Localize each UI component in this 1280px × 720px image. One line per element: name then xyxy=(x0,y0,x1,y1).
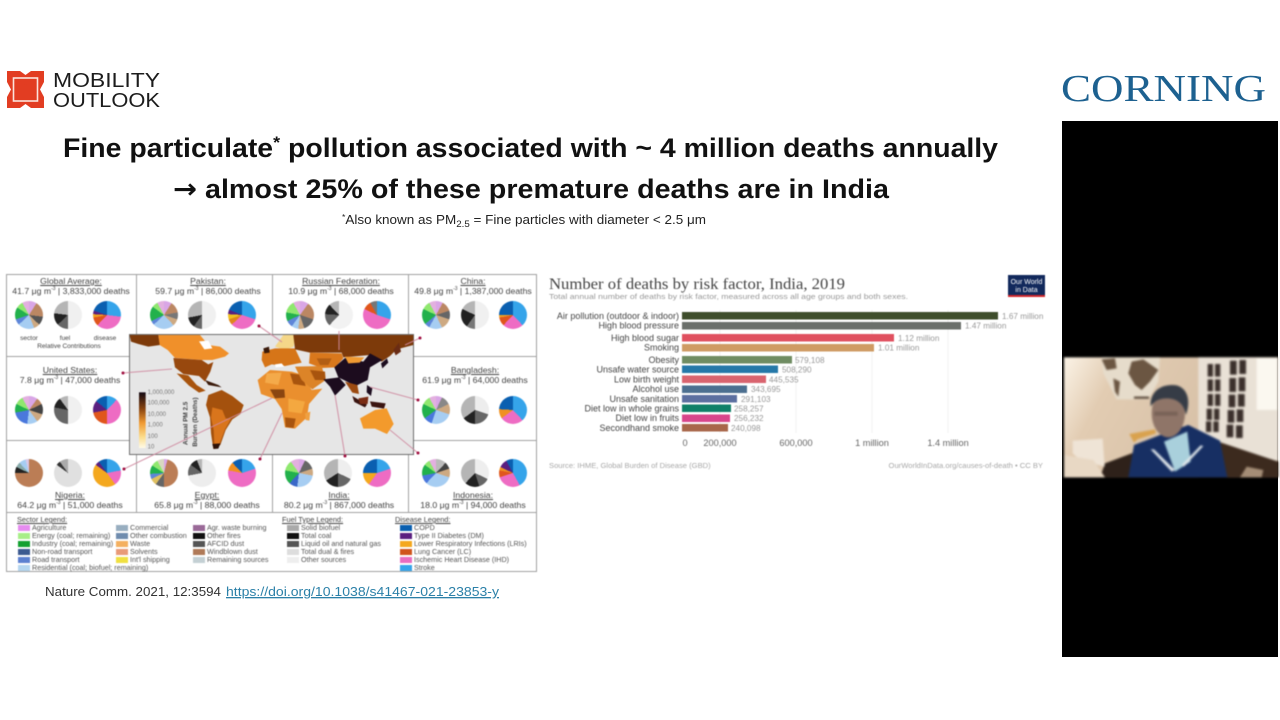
panel: India: India: xyxy=(328,490,350,500)
Russia and Asia xyxy=(293,335,413,409)
panel: Nigeria xyxy=(6,440,137,513)
chart: number of deaths by risk factor, India 2019 xyxy=(548,274,1046,470)
row labels: Unsafe water source xyxy=(596,364,679,374)
panel: Bangladesh: Bangladesh: xyxy=(451,365,499,375)
title: Fine particulate xyxy=(63,133,263,163)
panel: Egypt: 65.8 μg m-3 | 88,000 deaths xyxy=(154,500,260,510)
sector legend: Energy (coal; remaining) xyxy=(32,531,110,540)
logo: Our World in Data: Our World xyxy=(1011,279,1042,286)
panel: Global Average: 41.7 μg m-3 | 3,833,000 deaths xyxy=(12,286,130,296)
panel: Pakistan: 59.7 μg m-3 | 86,000 deaths xyxy=(155,286,261,296)
colour bar legend: 10 xyxy=(148,444,155,450)
panel: Pakistan: Pakistan: xyxy=(190,276,226,286)
value labels xyxy=(731,312,1044,433)
value labels: 445,535 xyxy=(769,376,799,384)
title: * xyxy=(273,133,280,152)
panel: Nigeria: Nigeria: xyxy=(55,490,85,500)
fuel type legend: Liquid oil and natural gas xyxy=(301,539,381,548)
panel: China: 49.8 μg m-3 | 1,387,000 deaths xyxy=(414,286,532,296)
logo: Mobility Outlook xyxy=(7,69,160,112)
sector legend: Int'l shipping xyxy=(130,555,170,564)
wall map art xyxy=(1102,357,1160,399)
sector legend: Sector Legend: xyxy=(17,515,67,524)
colour bar legend: 100 xyxy=(148,434,158,440)
Africa xyxy=(258,370,322,429)
logo wordmark xyxy=(53,69,160,112)
disease legend: Disease Legend: xyxy=(395,515,450,524)
panel: China xyxy=(408,274,537,357)
panel: legends xyxy=(6,512,537,572)
sector legend: Agr. waste burning xyxy=(207,523,267,532)
sector legend: Commercial xyxy=(130,523,168,532)
footnote: Also known as PM xyxy=(345,213,456,227)
citation: Nature Comm. 2021, 12:3594 xyxy=(45,584,221,599)
x axis: 200,000 xyxy=(703,438,737,448)
panel: Russian Federation xyxy=(272,274,409,357)
colour bar legend xyxy=(139,390,199,450)
sector legend: Other combustion xyxy=(130,531,187,540)
disease legend xyxy=(394,515,527,572)
fuel type legend xyxy=(281,515,382,564)
connector lines from map to panels xyxy=(120,324,422,472)
sector legend: Solvents xyxy=(130,547,158,556)
french doors xyxy=(1198,357,1278,477)
colour bar legend: 10,000 xyxy=(148,412,167,418)
panel: Global Average: sector xyxy=(20,335,38,342)
panel: Global Average: disease xyxy=(94,335,116,342)
Australia xyxy=(360,408,394,434)
panel: Global Average: fuel xyxy=(60,335,70,342)
sector legend: Agriculture xyxy=(32,523,66,532)
panel: Nigeria: 64.2 μg m-3 | 51,000 deaths xyxy=(17,500,123,510)
x axis: 600,000 xyxy=(779,438,813,448)
sector legend: Windblown dust xyxy=(207,547,258,556)
panel: Indonesia: 18.0 μg m-3 | 94,000 deaths xyxy=(420,500,526,510)
row labels: High blood pressure xyxy=(598,320,679,330)
disease legend: Lower Respiratory Infections (LRIs) xyxy=(414,539,527,548)
value labels: 240,098 xyxy=(731,424,761,433)
panel: Pakistan xyxy=(136,274,273,357)
webcam: presenter video xyxy=(1062,356,1280,480)
panel: United States: United States: xyxy=(43,365,97,375)
value labels: 1.47 million xyxy=(965,322,1007,330)
logo: Our World in Data: in Data xyxy=(1015,287,1038,294)
sector legend: Waste xyxy=(130,539,150,548)
value labels: 256,232 xyxy=(734,414,764,423)
x axis xyxy=(682,438,969,448)
source line: OurWorldInData.org/causes-of-death • CC BY xyxy=(889,461,1043,470)
fuel type legend: Solid biofuel xyxy=(301,523,340,532)
colour bar legend: 100,000 xyxy=(148,401,170,407)
x axis: 0 xyxy=(682,438,688,448)
panel: Egypt: Egypt: xyxy=(195,490,219,500)
panel: United States: 7.8 μg m-3 | 47,000 deaths xyxy=(20,375,120,385)
title: pollution associated with ~ 4 million deaths annually xyxy=(280,133,998,163)
row labels: Obesity xyxy=(648,355,679,365)
panel: Bangladesh: 61.9 μg m-3 | 64,000 deaths xyxy=(422,375,528,385)
logo wordmark: OUTLOOK xyxy=(53,89,160,112)
footnote: 2.5 xyxy=(456,219,470,229)
panel: black video column xyxy=(1062,121,1278,657)
value labels: 1.67 million xyxy=(1002,312,1044,321)
row labels xyxy=(557,311,679,433)
logo: Our World in Data xyxy=(1008,275,1045,297)
panel: China: China: xyxy=(460,276,486,286)
sector legend: Road transport xyxy=(32,555,80,564)
row labels: Air pollution (outdoor & indoor) xyxy=(557,311,679,321)
panel: Bangladesh xyxy=(408,356,537,441)
colour bar legend: Annual PM 2.5 xyxy=(183,401,190,445)
sector legend: Other fires xyxy=(207,531,241,540)
sector legend xyxy=(16,515,269,572)
colour bar legend: Burden (Deaths) xyxy=(192,397,199,447)
disease legend: Ischemic Heart Disease (IHD) xyxy=(414,555,509,564)
disease legend: Type II Diabetes (DM) xyxy=(414,531,484,540)
row labels: Alcohol use xyxy=(632,384,679,394)
footnote: = Fine particles with diameter < 2.5 μm xyxy=(470,213,706,227)
figure: PM2.5 world map and country pie panels xyxy=(6,274,538,572)
citation xyxy=(45,584,500,599)
panel: India xyxy=(272,440,409,513)
value labels: 343,695 xyxy=(751,385,781,394)
x axis: 1 million xyxy=(855,438,889,448)
sector legend: Residential (coal; biofuel; remaining) xyxy=(32,563,148,572)
colour bar legend: 1,000 xyxy=(148,423,163,429)
chart title: Number of deaths by risk factor, India, 2019 xyxy=(549,276,845,293)
floor and furniture xyxy=(1064,429,1263,477)
sector legend: Remaining sources xyxy=(207,555,269,564)
panel: India: 80.2 μg m-3 | 867,000 deaths xyxy=(284,500,394,510)
fuel type legend: Other sources xyxy=(301,555,346,564)
disease legend: COPD xyxy=(414,523,435,532)
fuel type legend: Total coal xyxy=(301,531,331,540)
panel: Russian Federation: 10.9 μg m-3 | 68,000 deaths xyxy=(288,286,394,296)
panel: Indonesia: Indonesia: xyxy=(453,490,493,500)
value labels: 258,257 xyxy=(734,404,764,414)
title: → almost 25% of these premature deaths are in India xyxy=(173,174,890,205)
panel: Global Average: Relative Contributions xyxy=(37,343,101,350)
sector legend: Industry (coal; remaining) xyxy=(32,539,113,548)
footnote xyxy=(342,213,706,229)
disease legend: Lung Cancer (LC) xyxy=(414,547,471,556)
row labels: Smoking xyxy=(644,342,679,352)
panel: Global Average: Global Average: xyxy=(40,276,102,286)
row labels: Diet low in fruits xyxy=(615,413,679,423)
row labels: Unsafe sanitation xyxy=(609,394,679,404)
row labels: Diet low in whole grains xyxy=(584,404,679,414)
sector legend: Non-road transport xyxy=(32,547,92,556)
row labels: Secondhand smoke xyxy=(599,423,679,433)
panel: United States xyxy=(6,356,137,441)
South America xyxy=(206,390,244,449)
bars xyxy=(682,312,998,432)
logo: Corning: CORNING xyxy=(1061,68,1266,110)
value labels: 579,108 xyxy=(795,356,825,365)
source line xyxy=(549,461,1043,470)
North America xyxy=(130,335,229,393)
value labels: 1.01 million xyxy=(878,344,920,352)
panel: Indonesia xyxy=(408,440,537,513)
value labels: 1.12 million xyxy=(898,334,940,343)
colour bar legend: 1,000,000 xyxy=(148,390,175,396)
row labels: Low birth weight xyxy=(614,374,679,384)
fuel type legend: Total dual & fires xyxy=(301,547,354,556)
presenter xyxy=(1128,385,1227,477)
x axis: 1.4 million xyxy=(927,438,969,448)
panel: Egypt xyxy=(136,440,273,513)
value labels: 508,290 xyxy=(782,366,812,374)
row labels: High blood sugar xyxy=(611,333,679,343)
title xyxy=(63,133,998,205)
Europe xyxy=(262,335,302,367)
footnote: * xyxy=(342,213,345,222)
fuel type legend: Fuel Type Legend: xyxy=(282,515,343,524)
sector legend: AFCID dust xyxy=(207,539,244,548)
icon: red cross logo mark xyxy=(7,71,44,108)
value labels: 291,103 xyxy=(741,395,771,404)
source line: Source: IHME, Global Burden of Disease (GBD) xyxy=(549,461,711,470)
citation: https://doi.org/10.1038/s41467-021-23853-y xyxy=(226,584,500,599)
panel: Global Average xyxy=(6,274,137,357)
chart subtitle: Total annual number of deaths by risk factor, measured across all age groups and both sexes. xyxy=(549,292,908,301)
world map of PM2.5 deaths xyxy=(128,333,415,456)
disease legend: Stroke xyxy=(414,563,435,572)
panel: Russian Federation: Russian Federation: xyxy=(302,276,380,286)
logo wordmark: MOBILITY xyxy=(53,69,160,92)
